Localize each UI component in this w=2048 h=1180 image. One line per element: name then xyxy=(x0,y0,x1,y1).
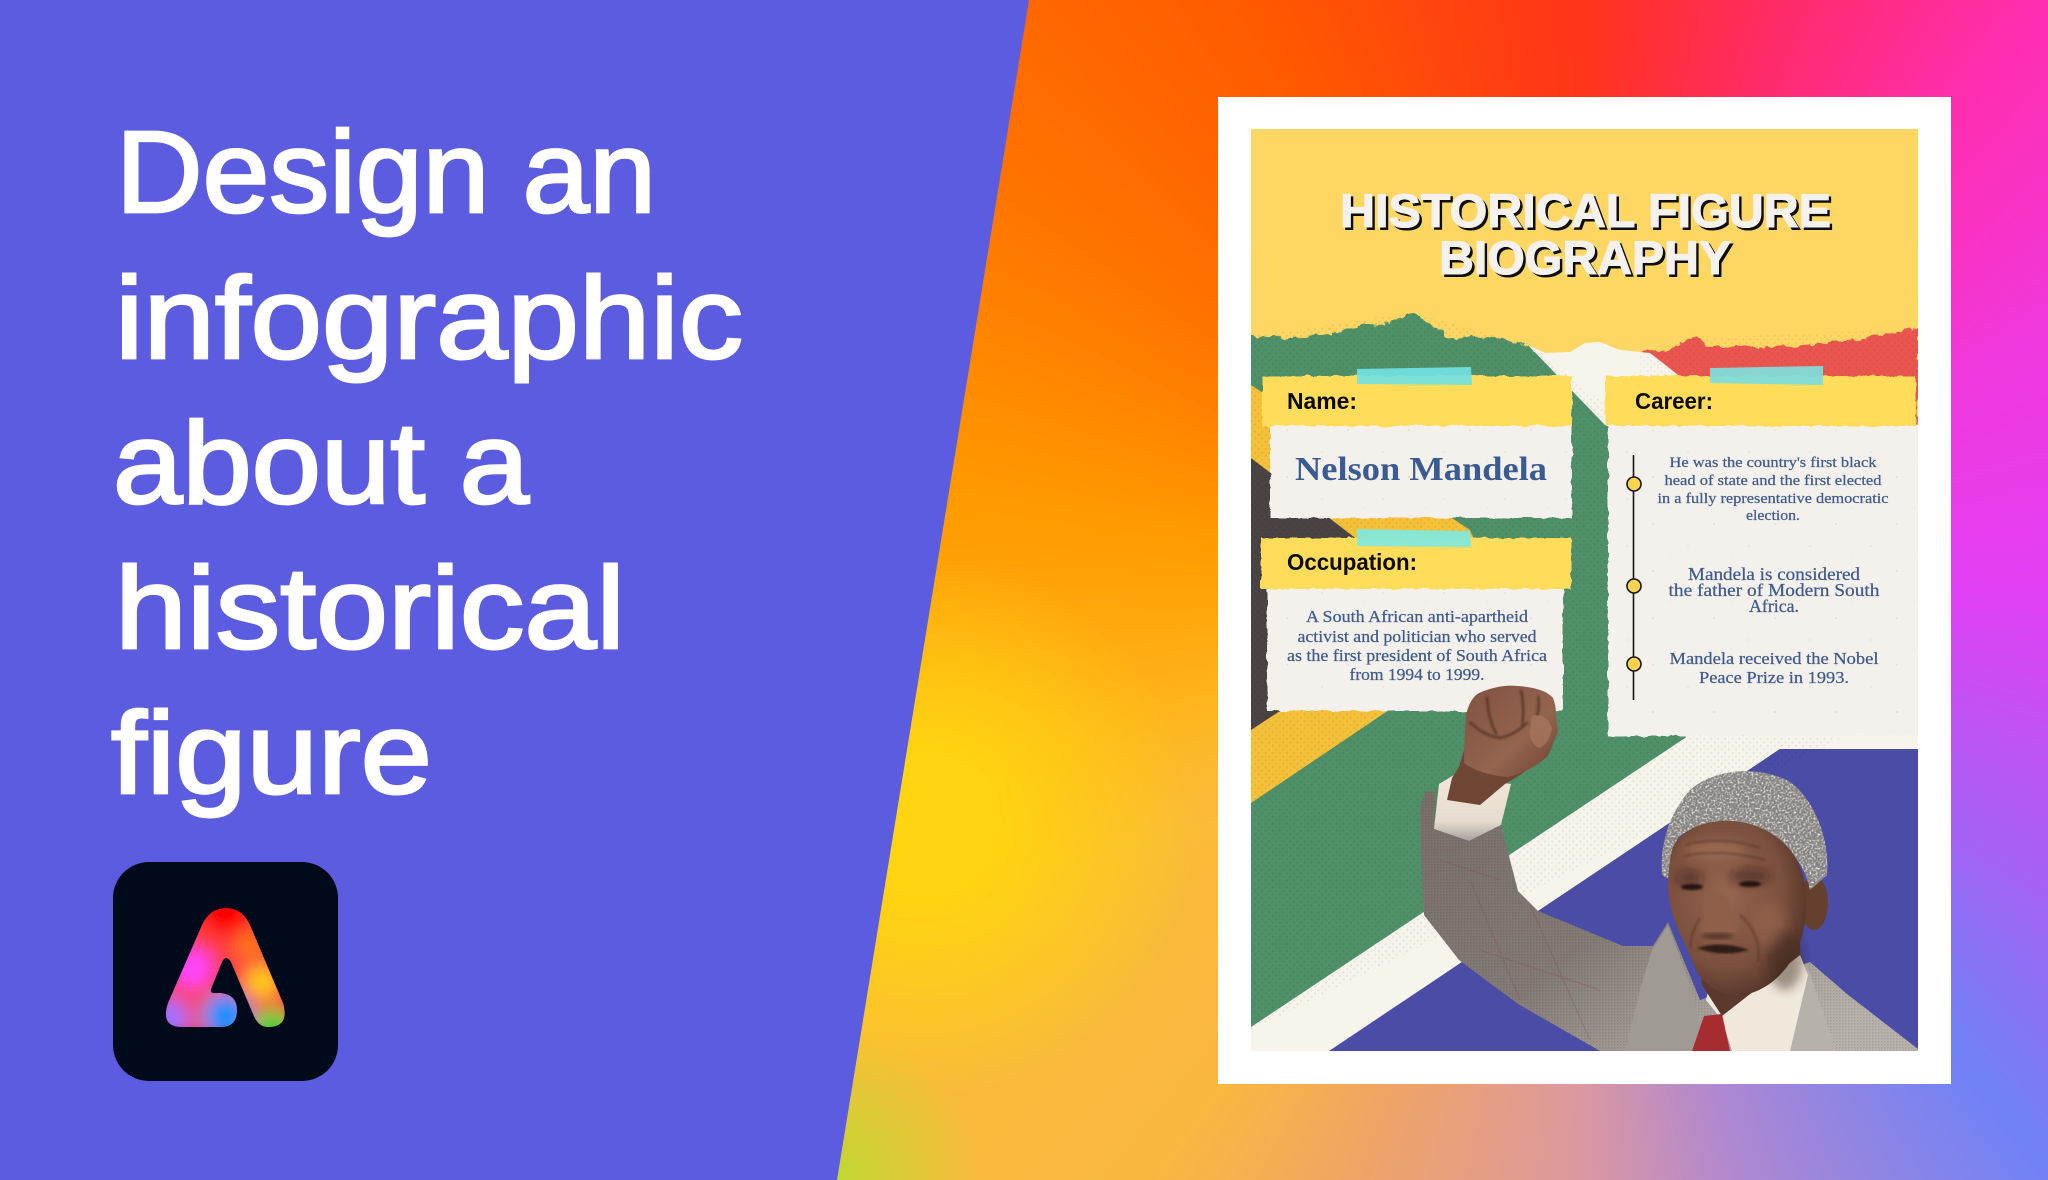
white diagonal top xyxy=(1528,342,1678,426)
white shirt collar xyxy=(1706,955,1808,1051)
career item 2: Africa. xyxy=(1749,596,1799,616)
nostril shadow xyxy=(1702,933,1734,939)
career header xyxy=(1605,376,1916,426)
career item 2 xyxy=(1668,567,1880,612)
plaid lines xyxy=(1440,860,1600,1040)
occupation text: as the first president of South Africa xyxy=(1287,646,1548,665)
name label: Name: xyxy=(1287,388,1357,414)
tape xyxy=(1357,367,1472,385)
title: HISTORICAL FIGURE xyxy=(1340,184,1831,237)
face xyxy=(1668,821,1806,995)
panel: career xyxy=(1605,366,1924,736)
halftone on red xyxy=(1640,329,1918,422)
nose xyxy=(1702,892,1738,937)
headline: historical xyxy=(115,543,625,673)
red torn strip xyxy=(1642,328,1918,424)
headline: about a xyxy=(113,398,530,528)
ear xyxy=(1804,880,1828,930)
icon: Adobe Express logo xyxy=(113,862,338,1081)
career item 3: Mandela received the Nobel xyxy=(1670,649,1879,668)
career item 1: election. xyxy=(1746,508,1800,524)
career item 3 xyxy=(1670,652,1878,684)
poster artwork xyxy=(1240,129,1930,1060)
raised forearm xyxy=(1447,749,1526,805)
occupation text xyxy=(1287,607,1548,684)
mouth xyxy=(1697,944,1749,954)
tape xyxy=(1710,366,1823,385)
name value: Nelson Mandela xyxy=(1295,451,1547,488)
occupation text: activist and politician who served xyxy=(1298,627,1537,646)
panel: name xyxy=(1262,367,1572,518)
suit jacket xyxy=(1420,791,1918,1051)
career item 2: the father of Modern South xyxy=(1668,580,1880,600)
career item 2: Mandela is considered xyxy=(1688,564,1860,584)
eyes xyxy=(1681,881,1761,890)
yellow Y band xyxy=(1251,385,1474,803)
career item 1: He was the country's first black xyxy=(1670,455,1877,471)
career label: Career: xyxy=(1635,388,1713,414)
career item 3: Peace Prize in 1993. xyxy=(1699,668,1849,687)
dark triangle xyxy=(1251,458,1354,730)
right green strip xyxy=(1900,501,1918,687)
poster card xyxy=(1218,97,1951,1084)
shirt cuff xyxy=(1434,775,1511,841)
right lapel xyxy=(1790,962,1836,1051)
lapel xyxy=(1626,926,1700,1051)
hair xyxy=(1662,771,1827,890)
career paper xyxy=(1608,424,1924,736)
panel: occupation xyxy=(1261,529,1571,711)
headline: figure xyxy=(111,688,432,818)
portrait: Nelson Mandela illustration xyxy=(1420,686,1918,1051)
career item 1: in a fully representative democratic xyxy=(1658,491,1889,507)
timeline xyxy=(1627,455,1641,700)
face shading xyxy=(1676,840,1803,990)
headline: Design an xyxy=(116,107,656,237)
wrinkles xyxy=(1684,841,1765,962)
occupation text: A South African anti-apartheid xyxy=(1306,607,1529,626)
career item 1 xyxy=(1658,455,1889,524)
yellow sky xyxy=(1251,129,1918,429)
career item 1: head of state and the first elected xyxy=(1664,473,1882,489)
tape xyxy=(1357,529,1471,547)
occupation text: from 1994 to 1999. xyxy=(1350,665,1484,684)
name paper xyxy=(1270,424,1572,518)
name header xyxy=(1262,376,1572,426)
red tie xyxy=(1692,1014,1730,1051)
headline xyxy=(111,107,743,818)
green flag field xyxy=(1251,313,1780,1027)
white diagonal band xyxy=(1251,724,1918,1051)
torn darker band xyxy=(1251,238,1918,290)
headline: infographic xyxy=(115,253,743,383)
halftone texture xyxy=(1251,314,1842,1030)
blue field xyxy=(1329,749,1918,1051)
neck xyxy=(1701,942,1800,1016)
occupation header xyxy=(1261,538,1571,589)
white card frame xyxy=(1218,97,1951,1084)
blue left panel xyxy=(0,0,1029,1180)
occupation label: Occupation: xyxy=(1287,549,1417,575)
title: BIOGRAPHY xyxy=(1439,231,1731,284)
fist xyxy=(1464,686,1558,777)
title xyxy=(1340,184,1831,284)
occupation paper xyxy=(1267,587,1563,711)
